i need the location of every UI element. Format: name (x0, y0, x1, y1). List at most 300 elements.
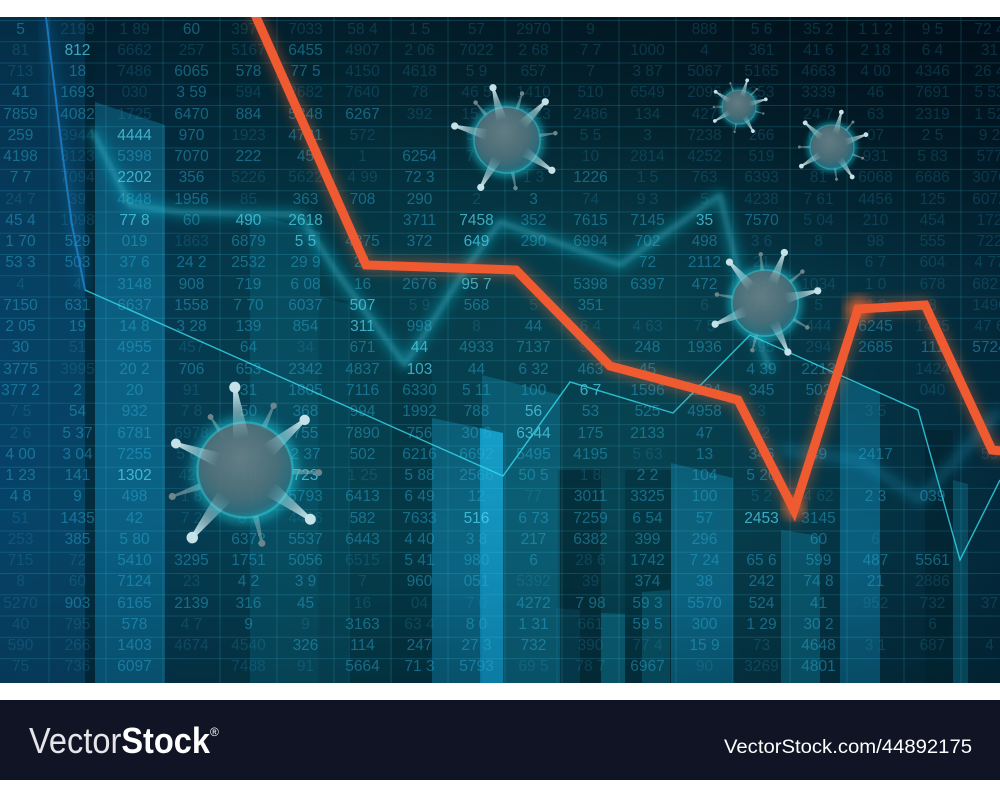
number table: 20 2 (119, 361, 150, 378)
number table: 7488 (231, 658, 266, 675)
number table: 525 (635, 403, 660, 420)
number table: 5 (529, 297, 538, 314)
number table: 2319 (915, 106, 950, 123)
number table: 723 (293, 467, 318, 484)
number table: 4 (700, 42, 709, 59)
number table: 72 (639, 254, 656, 271)
number table: 37 6 (119, 254, 150, 271)
number table: 134 (635, 106, 660, 123)
number table: 5561 (915, 552, 950, 569)
number table: 5165 (744, 63, 779, 80)
number table: 3325 (630, 488, 665, 505)
number table: 50 5 (518, 467, 549, 484)
number table: 657 (521, 63, 546, 80)
number table: 74 (582, 191, 599, 208)
number table: 1424 (915, 361, 950, 378)
number table: 4 (73, 276, 82, 293)
number table: 903 (65, 595, 90, 612)
number table: 311 (350, 318, 375, 335)
number table: 7137 (516, 339, 551, 356)
number table: 6470 (174, 106, 209, 123)
number table: 222 (236, 148, 261, 165)
number table: 7124 (117, 573, 152, 590)
number table: 4 39 (746, 361, 777, 378)
number table: 2 3 (865, 488, 886, 505)
number table: 7238 (687, 127, 722, 144)
number table: 5398 (573, 276, 608, 293)
number table: 6245 (858, 318, 893, 335)
number table: 6393 (744, 169, 779, 186)
number table: 2970 (516, 20, 551, 38)
number table: 1034 (801, 276, 836, 293)
number table: 687 (920, 637, 945, 654)
number table: 5 83 (917, 148, 948, 165)
number table: 4198 (3, 148, 38, 165)
number table: 53 (582, 403, 599, 420)
number table: 7 (586, 63, 595, 80)
number table: 6978 (174, 425, 209, 442)
number table: 296 (692, 531, 717, 548)
number table: 6692 (459, 446, 494, 463)
thick blurred cyan line (92, 130, 1000, 500)
number table: 19 (69, 318, 86, 335)
number table: 1410 (516, 84, 551, 101)
number table: 472 (692, 276, 717, 293)
number table: 444 (806, 318, 831, 335)
number table: 888 (692, 20, 717, 38)
number table: 4848 (117, 191, 152, 208)
number table: 290 (407, 191, 432, 208)
number table: 795 (65, 616, 90, 633)
number table: 45 (297, 148, 314, 165)
number table: 3148 (117, 276, 152, 293)
number table: 72 3 (404, 169, 435, 186)
number table: 1992 (402, 403, 437, 420)
number table: 6 5 (808, 127, 829, 144)
number table: 3 (643, 127, 652, 144)
number table: 1 1 2 (858, 20, 893, 38)
number table: 34 (297, 339, 314, 356)
number table: 7 1 (466, 148, 487, 165)
number table: 16 (354, 595, 371, 612)
number table: 7116 (346, 382, 379, 399)
number table: 510 (578, 84, 603, 101)
number table: 4618 (402, 63, 437, 80)
number table: 4 2 (238, 573, 259, 590)
number table: 7 7 (580, 42, 601, 59)
number table: 352 (521, 212, 546, 229)
number table: 1425 (915, 318, 950, 335)
number table: 454 (920, 212, 945, 229)
number table: 3 28 (176, 318, 207, 335)
number table: 932 (122, 403, 147, 420)
number table: 1226 (573, 169, 608, 186)
number table: 5 (700, 191, 709, 208)
number table: 590 (8, 637, 33, 654)
number table: 4721 (288, 127, 323, 144)
number table: 2 (73, 382, 82, 399)
number table: 8 (472, 318, 481, 335)
number table: 54 (69, 403, 86, 420)
number table: 45 4 (5, 212, 36, 229)
number table: 60 (69, 573, 86, 590)
number table: 217 (521, 531, 546, 548)
number table: 5270 (3, 595, 38, 612)
number table: 368 (293, 403, 318, 420)
number table: 6 (928, 616, 937, 633)
number table: 6372 (231, 531, 266, 548)
number table: 1725 (117, 106, 152, 123)
number table: 90 (696, 658, 713, 675)
virus: large lower left (168, 381, 322, 547)
virus: middle right (710, 247, 822, 358)
number table: 6 4 (580, 318, 601, 335)
number table: 1596 (630, 382, 665, 399)
number table: 6344 (516, 425, 551, 442)
number table: 5 37 (62, 425, 93, 442)
virus: top centre (450, 83, 558, 193)
number table: 4907 (345, 42, 380, 59)
number table: 490 (236, 212, 261, 229)
number table: 30 (12, 339, 29, 356)
number table: 9 2 (979, 127, 1000, 144)
number table: 5 8 (466, 127, 487, 144)
number table: 4 2 (865, 297, 886, 314)
number table: 81 (810, 169, 827, 186)
number table: 3 1 (865, 637, 886, 654)
number table: 7458 (459, 212, 494, 229)
number table: 2886 (915, 573, 950, 590)
number table: 5 88 (404, 467, 435, 484)
number table: 58 4 (347, 20, 378, 38)
number table: 732 (920, 595, 945, 612)
number table: 706 (179, 361, 204, 378)
number table: 4 99 (347, 169, 378, 186)
number table: 1000 (630, 42, 665, 59)
number table: 253 (749, 84, 774, 101)
number table: 6413 (345, 488, 380, 505)
number table: 41 6 (803, 42, 834, 59)
number table: 555 (920, 233, 945, 250)
number table: 2199 (60, 20, 95, 38)
number table: 7033 (288, 20, 323, 38)
number table: 4955 (117, 339, 152, 356)
number table: 49 (810, 446, 827, 463)
number table: 653 (236, 361, 261, 378)
number table: 1 8 (181, 488, 202, 505)
number table: 7 8 (181, 403, 202, 420)
number table: 38 (696, 573, 713, 590)
number table: 7 2 (181, 510, 202, 527)
number table: 2814 (630, 148, 665, 165)
number table: 3269 (744, 658, 779, 675)
number table: 266 (749, 127, 774, 144)
number table: 14 8 (119, 318, 150, 335)
number table: 7795 (744, 297, 779, 314)
number table: 8 (928, 297, 937, 314)
number table: 1 23 (5, 467, 36, 484)
number table: 51 (69, 339, 86, 356)
number table: 9 (187, 531, 196, 548)
number table: 2676 (402, 276, 437, 293)
number table: 1302 (117, 467, 152, 484)
number table: 3711 (403, 212, 436, 229)
number table: 594 (236, 84, 261, 101)
number table: 6455 (288, 42, 323, 59)
number table: 294 (806, 339, 831, 356)
number table: 5392 (516, 573, 551, 590)
number table: 44 (810, 148, 827, 165)
number table: 503 (65, 254, 90, 271)
number table: 111 (921, 339, 944, 356)
number table: 884 (236, 106, 261, 123)
number table: 578 (236, 63, 261, 80)
number table: 6686 (915, 169, 950, 186)
number table: 95 7 (461, 276, 492, 293)
number table: 6967 (630, 658, 665, 675)
image id: VectorStock.com/44892175 (724, 737, 972, 758)
number table: 247 (407, 637, 432, 654)
number table: 7 24 (689, 552, 720, 569)
number table: 1 3 (523, 169, 544, 186)
number table: 53 3 (5, 254, 36, 271)
number table: 3 5 (865, 403, 886, 420)
number table: 44 (525, 318, 542, 335)
number table: 908 (179, 276, 204, 293)
number table: 4 63 (632, 318, 663, 335)
number table: 1956 (174, 191, 209, 208)
number table: 51 (12, 510, 29, 527)
number table: 039 (920, 488, 945, 505)
number table: 2566 (459, 467, 494, 484)
number table: 5410 (117, 552, 152, 569)
number table: 71 3 (404, 658, 435, 675)
number table: 1352 (744, 318, 779, 335)
logo: VectorStock (29, 720, 211, 761)
number table: 24 7 (803, 106, 834, 123)
number table: 73 (753, 637, 770, 654)
number table: 2 05 (5, 318, 36, 335)
number table: 6254 (402, 148, 437, 165)
number table: 040 (920, 382, 945, 399)
number table: 7 5 (10, 403, 31, 420)
number table: 57 (468, 20, 485, 38)
number table: 72 (69, 552, 86, 569)
number table: 4444 (117, 127, 152, 144)
number table: 6 (871, 531, 880, 548)
number table: 5398 (117, 148, 152, 165)
number table: 2139 (174, 595, 209, 612)
number table: 385 (65, 531, 90, 548)
number table: 8 (16, 573, 25, 590)
number table: 4540 (231, 637, 266, 654)
number table: 2112 (688, 254, 721, 271)
number table: 266 (65, 637, 90, 654)
number table: 4 40 (404, 531, 435, 548)
number table: 7450 (744, 276, 779, 293)
number table: 4346 (915, 63, 950, 80)
number table: 502 (806, 382, 831, 399)
number table: 6 54 (632, 510, 663, 527)
number table: 5 63 (632, 446, 663, 463)
number table: 5 11 (462, 382, 491, 399)
number table: 4 8 (10, 488, 31, 505)
number table: 4252 (687, 148, 722, 165)
number table: 854 (293, 318, 318, 335)
number table: 392 (407, 106, 432, 123)
number table: 44 (468, 361, 485, 378)
number table: 4436 (288, 510, 323, 527)
number table: 6 8 (238, 510, 259, 527)
number table: 736 (65, 658, 90, 675)
number table: 5 20 (746, 467, 777, 484)
number table: 6 (529, 552, 538, 569)
number table: 7 98 (575, 595, 606, 612)
number table: 175 (578, 425, 603, 442)
number table: 463 (578, 361, 603, 378)
number table: 78 (411, 84, 428, 101)
number table: 4 00 (5, 446, 36, 463)
number table: 763 (692, 169, 717, 186)
number table: 15 9 (461, 106, 492, 123)
number table: 290 (521, 233, 546, 250)
number table: 3944 (60, 127, 95, 144)
number table: 2 06 (404, 42, 435, 59)
number table: 1863 (174, 233, 209, 250)
number table: 6549 (630, 84, 665, 101)
number table: 702 (635, 233, 660, 250)
number table: 2 6 (10, 425, 31, 442)
number table: 2202 (117, 169, 152, 186)
number table: 1 (358, 148, 367, 165)
number table: 103 (407, 361, 432, 378)
number table: 1 89 (119, 20, 150, 38)
number table: 2 2 (637, 467, 658, 484)
number table: 1403 (117, 637, 152, 654)
number table: 732 (521, 637, 546, 654)
number table: 970 (179, 127, 204, 144)
number table: 719 (236, 276, 261, 293)
number table: 6662 (117, 42, 152, 59)
number table: 29 9 (290, 254, 321, 271)
number table: 420 (179, 467, 204, 484)
number table: 019 (122, 233, 147, 250)
number table: 40 (12, 616, 29, 633)
number table: 356 (179, 169, 204, 186)
number table: 4 62 (803, 488, 834, 505)
number table: 1 31 (518, 616, 549, 633)
number table: 1 5 (409, 20, 430, 38)
number table: 4375 (345, 233, 380, 250)
number table: 7 5 (694, 318, 715, 335)
number table: 242 (749, 573, 774, 590)
number table: 3123 (60, 148, 95, 165)
number table: 7691 (915, 84, 950, 101)
number table: 390 (578, 637, 603, 654)
number table: 4 (16, 276, 25, 293)
number table: 85 (240, 191, 257, 208)
number table: 6097 (117, 658, 152, 675)
number table: 6781 (117, 425, 152, 442)
number table: 4801 (801, 658, 836, 675)
number table: 3 8 (466, 531, 487, 548)
number table: 6182 (231, 467, 266, 484)
number table: 5 2 (751, 488, 772, 505)
thin cyan line chart (85, 290, 1000, 560)
number table: 6 (700, 297, 709, 314)
number table: 1751 (231, 552, 266, 569)
number table: 5537 (288, 531, 323, 548)
number table: 3163 (345, 616, 380, 633)
number table: 9 (73, 488, 82, 505)
number table: 125 (920, 191, 945, 208)
number table: 77 8 (119, 212, 150, 229)
number table: 346 (749, 446, 774, 463)
number table: 6 49 (404, 488, 435, 505)
number table: 6397 (630, 276, 665, 293)
number table: 27 3 (461, 637, 492, 654)
number table: 6 73 (518, 510, 549, 527)
number table: 5 6 (751, 20, 772, 38)
number table: 1098 (60, 212, 95, 229)
number table: 6 4 (922, 42, 943, 59)
number table: 64 (240, 339, 257, 356)
number table: 9 (301, 616, 310, 633)
number table: 2486 (573, 106, 608, 123)
number table: 35 (696, 212, 713, 229)
number table: 2532 (231, 254, 266, 271)
thin blue line (46, 17, 85, 290)
number table: 6267 (345, 106, 380, 123)
number table: 1435 (60, 510, 95, 527)
number table: 04 (411, 595, 428, 612)
registered mark: ® (210, 725, 219, 739)
number table: 46 5 (461, 84, 492, 101)
number table: 24 7 (5, 191, 36, 208)
number table: 3 87 (632, 63, 663, 80)
number table: 31 (981, 42, 998, 59)
number table: 599 (806, 552, 831, 569)
number table: 5167 (231, 42, 266, 59)
number table: 4272 (516, 595, 551, 612)
number table: 39 (69, 191, 86, 208)
number table: 4238 (744, 191, 779, 208)
number table: 7890 (345, 425, 380, 442)
number table: 21 (354, 254, 371, 271)
number table: 7 70 (233, 297, 264, 314)
number table: 6216 (402, 446, 437, 463)
number table: 4 (985, 637, 994, 654)
number table: 3 9 (295, 573, 316, 590)
number table: 24 2 (176, 254, 207, 271)
number table: 3295 (174, 552, 209, 569)
number table: 1 70 (5, 233, 36, 250)
number table: 39 (582, 573, 599, 590)
number table: 631 (65, 297, 90, 314)
number table: 2453 (744, 510, 779, 527)
number table: 2417 (858, 446, 893, 463)
number table: 3 (757, 403, 766, 420)
number table: 300 (692, 616, 717, 633)
number table: 051 (464, 573, 489, 590)
number table: 931 (863, 148, 888, 165)
number table: 59 5 (632, 616, 663, 633)
number table: 1 8 (580, 467, 601, 484)
number table: 5622 (288, 169, 323, 186)
number table: 502 (350, 446, 375, 463)
number table: 2618 (288, 212, 323, 229)
number table: 2 18 (860, 42, 891, 59)
